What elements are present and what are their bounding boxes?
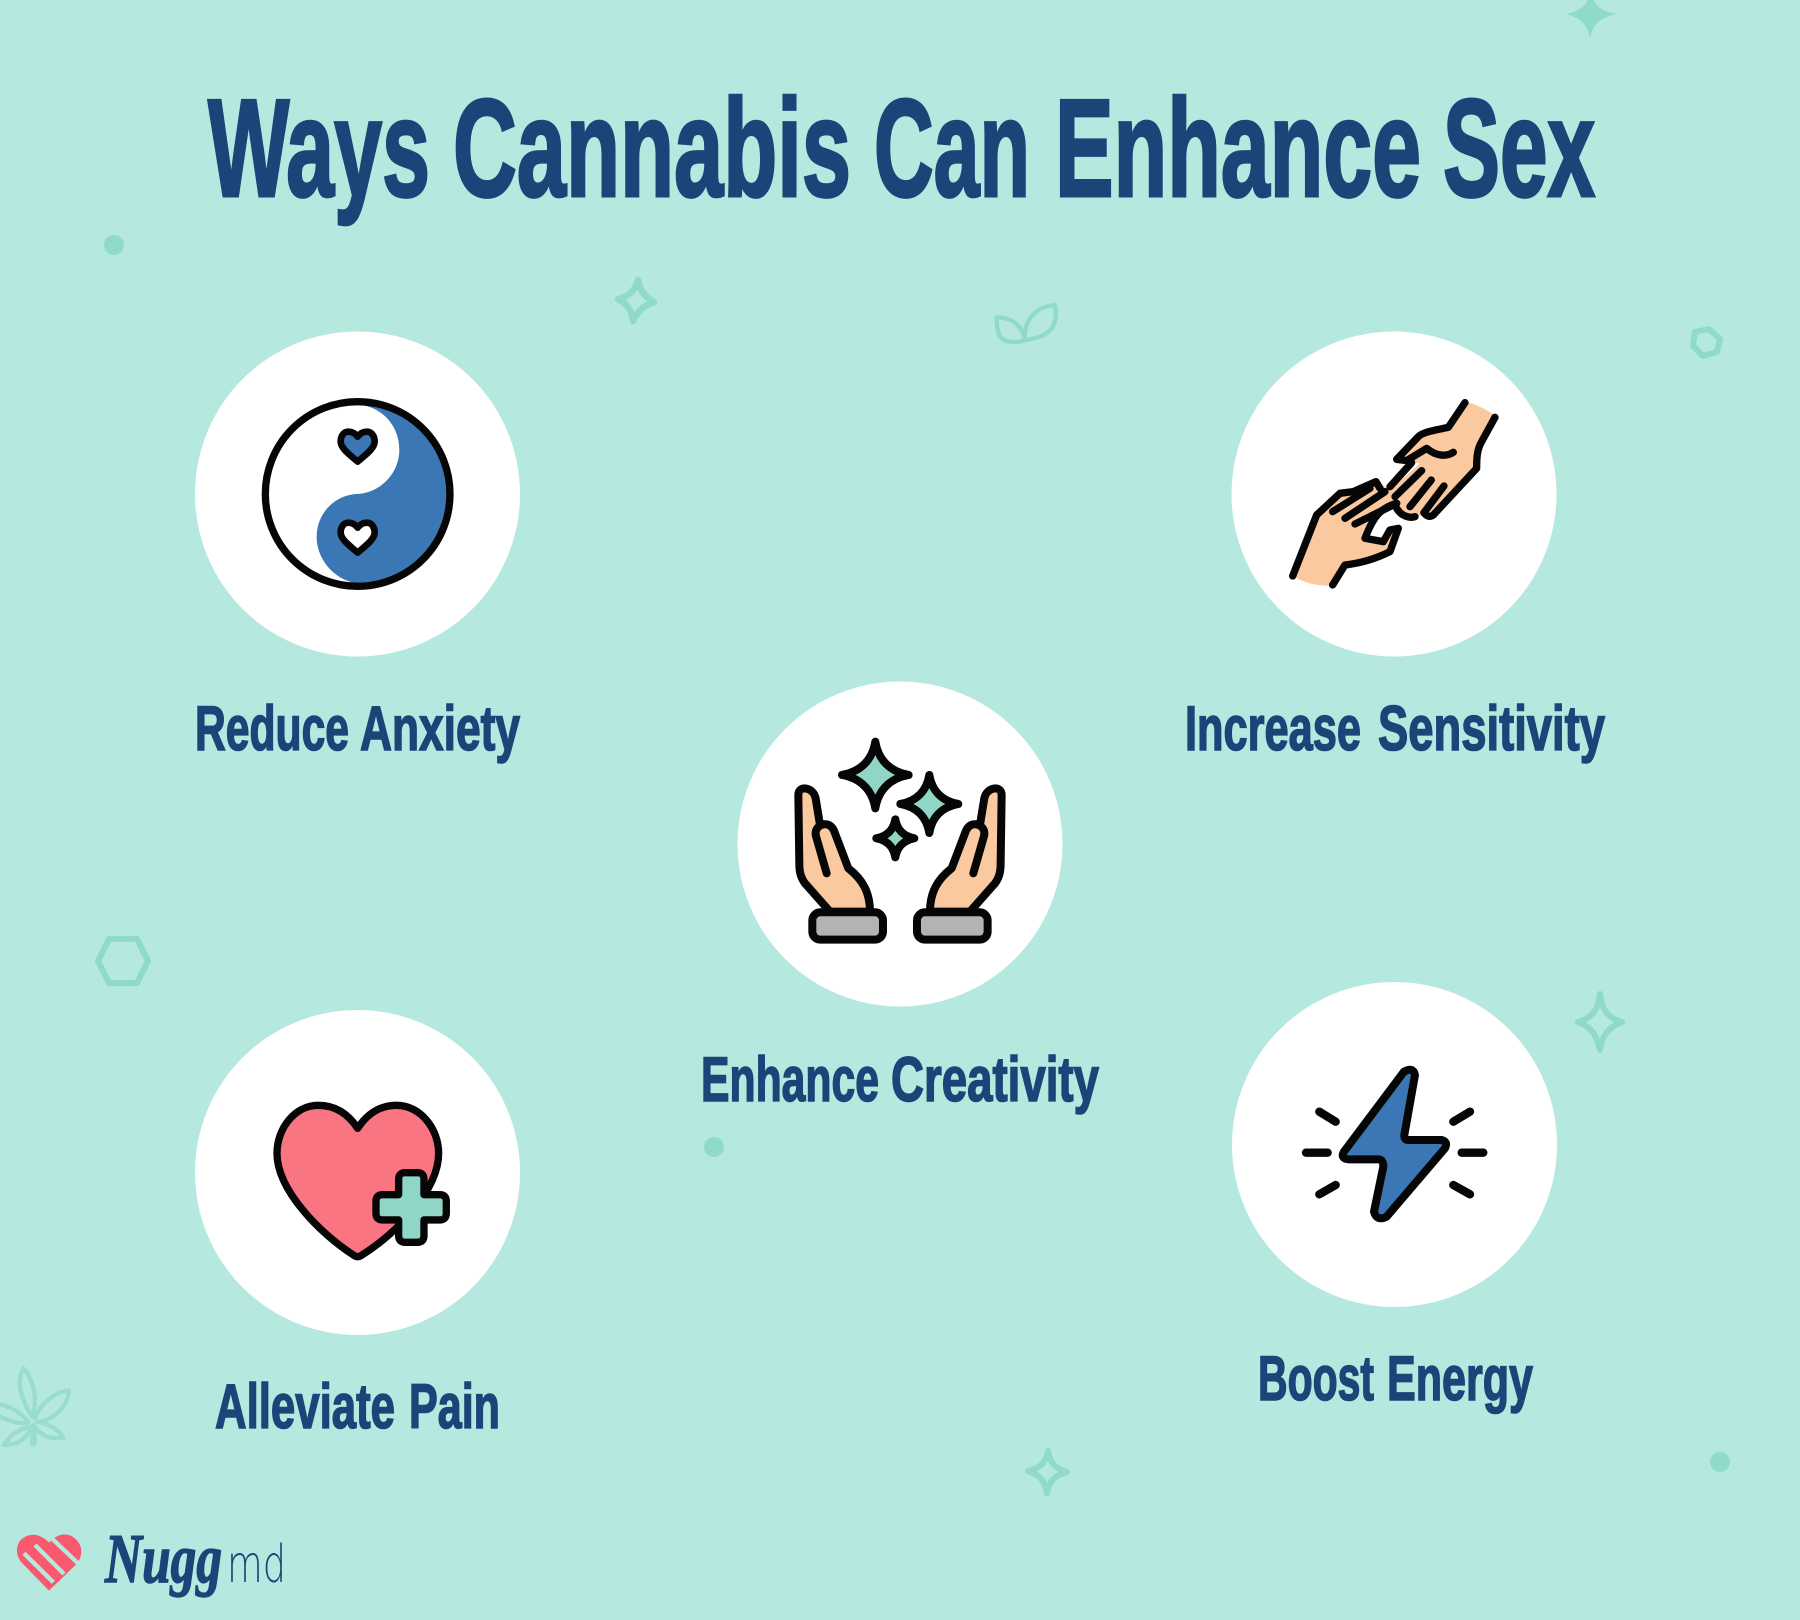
icon: lightning bolt: [1306, 1070, 1483, 1218]
icon: yin yang with hearts: [265, 402, 450, 586]
panel: reduce anxiety: [195, 332, 520, 764]
decoration: filled star top right: [1566, 0, 1616, 38]
decoration: dot centre: [704, 1137, 724, 1157]
decoration: outline star bottom: [1028, 1451, 1067, 1493]
white circle: [738, 682, 1062, 1006]
decoration: small hexagon: [1693, 329, 1720, 356]
label: [1185, 694, 1605, 764]
icon: touching hands: [1293, 402, 1496, 586]
label: Sensitivity: [1378, 694, 1605, 764]
panel: boost energy: [1232, 982, 1557, 1414]
white circle: [195, 1010, 520, 1335]
icon: heart with plus: [277, 1105, 446, 1257]
decoration: dot lower right: [1710, 1452, 1730, 1472]
decoration: leaf: [997, 305, 1056, 342]
panel: alleviate pain: [195, 1010, 520, 1442]
decoration: dot upper left: [104, 235, 124, 255]
label: [1258, 1344, 1533, 1414]
label: Enhance: [701, 1045, 879, 1115]
decoration: cannabis leaf: [0, 1368, 69, 1445]
decoration: tall outline star right: [1578, 994, 1622, 1050]
white circle: [1232, 332, 1556, 656]
decoration: large hexagon: [98, 939, 148, 983]
label: Creativity: [891, 1045, 1099, 1115]
logo: nuggmd: [17, 1521, 286, 1598]
wordmark: Nugg: Nugg: [104, 1521, 222, 1598]
wordmark: md: md: [227, 1535, 286, 1595]
label: [701, 1045, 1099, 1115]
title: Can: [874, 71, 1030, 226]
title: Enhance: [1055, 71, 1421, 226]
icon: striped heart: [17, 1534, 81, 1591]
label: Alleviate: [215, 1372, 395, 1442]
white circle: [195, 332, 520, 656]
label: Pain: [409, 1372, 500, 1442]
label: Anxiety: [360, 694, 520, 764]
label: Boost: [1258, 1344, 1374, 1414]
title: Sex: [1443, 71, 1595, 226]
panel: increase sensitivity: [1185, 332, 1605, 764]
panel: enhance creativity: [701, 682, 1099, 1115]
label: Reduce: [195, 694, 349, 764]
title: Ways: [208, 71, 430, 226]
label: Energy: [1387, 1344, 1533, 1414]
decoration: outline star top: [618, 280, 654, 321]
title: [208, 71, 1595, 226]
title: Cannabis: [453, 71, 851, 226]
icon: hands with sparkles: [798, 742, 1002, 940]
white circle: [1232, 982, 1557, 1307]
label: Increase: [1185, 694, 1361, 764]
